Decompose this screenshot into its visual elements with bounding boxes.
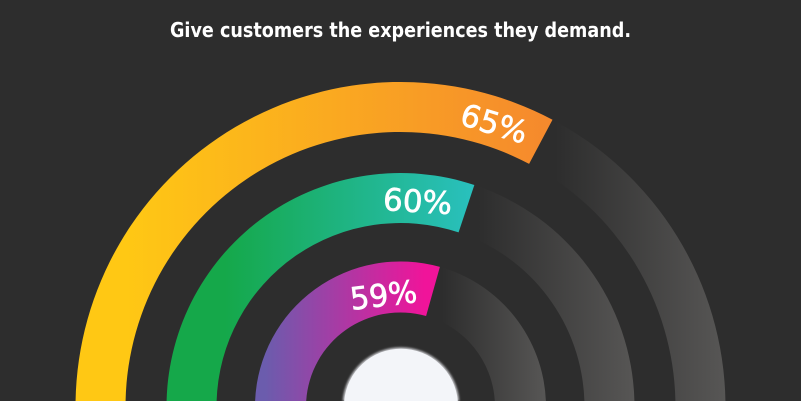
remaining track: middle <box>459 185 634 401</box>
value arc: inner <box>255 261 440 401</box>
remaining track: outer <box>529 120 725 401</box>
value arc: middle <box>167 173 474 401</box>
label: 65%: 65% <box>456 97 532 152</box>
ring: 65 percent <box>76 82 725 401</box>
label: 60%: 60% <box>382 182 453 222</box>
ring: 60 percent <box>167 173 634 401</box>
title: Give customers the experiences they demand. <box>170 18 631 42</box>
remaining track: inner <box>426 267 546 401</box>
centre circle <box>343 347 459 401</box>
ring: 59 percent <box>255 261 546 401</box>
value arc: outer <box>76 82 552 401</box>
label: 59%: 59% <box>348 274 419 318</box>
